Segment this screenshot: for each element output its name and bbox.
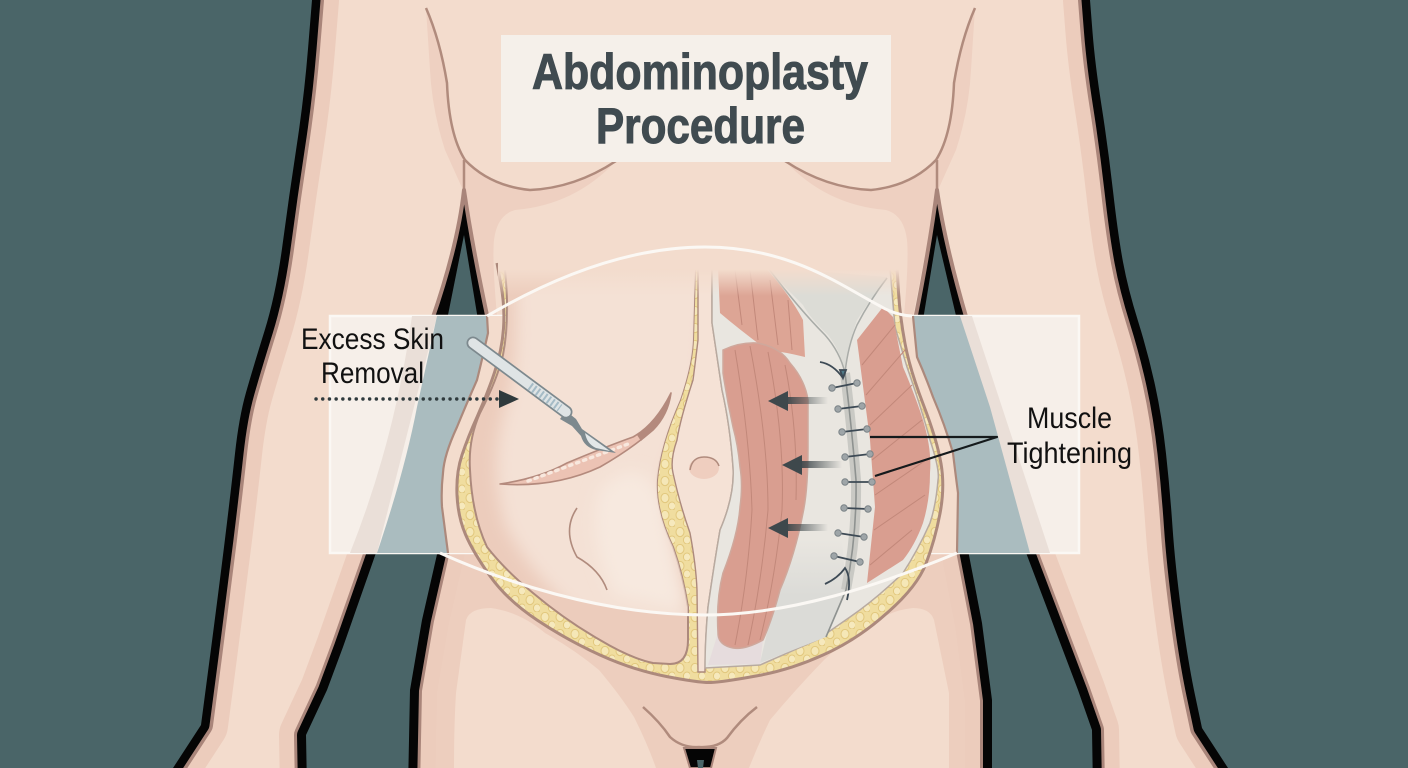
title box: Abdominoplasty [532,44,868,100]
fascia sheath [705,265,938,668]
callout: muscle tightening: Tightening [1007,437,1132,470]
background: right outside [1090,0,1408,768]
lower gap left [306,550,438,768]
top fade of anatomy [498,250,902,296]
navel strip [672,265,733,672]
left abdominal skin flap [468,272,696,665]
navel [689,457,719,479]
lower gap right [968,550,1093,768]
groin line and crotch gap [643,707,757,768]
subcutaneous fat layer [457,263,943,683]
leader lines [870,437,997,476]
muscle: main rectus [718,343,808,648]
incision [500,393,671,485]
callout: excess skin removal: Removal [321,357,424,390]
muscle: oblique [857,307,930,583]
dotted arrow [316,390,519,408]
title box [501,35,891,162]
arrow: muscle pull 3 [768,518,828,538]
skin fold [570,508,607,590]
title box: Procedure [596,98,805,154]
armpit gap left [432,190,488,320]
callout: muscle tightening [870,402,1132,476]
arrow: muscle pull 1 [768,391,828,411]
callout: muscle tightening: Muscle [1027,402,1112,435]
arrow: muscle pull 2 [782,455,842,475]
torso window [442,316,958,553]
chest folds [426,8,975,316]
callout: excess skin removal [301,323,519,408]
translucent side panel [330,316,1079,553]
window outline [440,247,957,615]
sutures [820,362,875,600]
armpit gap right [915,190,967,320]
central seam [768,268,887,637]
icon: scalpel [473,343,616,453]
callout: excess skin removal: Excess Skin [301,323,444,356]
muscle: upper rectus [718,267,805,357]
background: left outside [0,0,312,768]
